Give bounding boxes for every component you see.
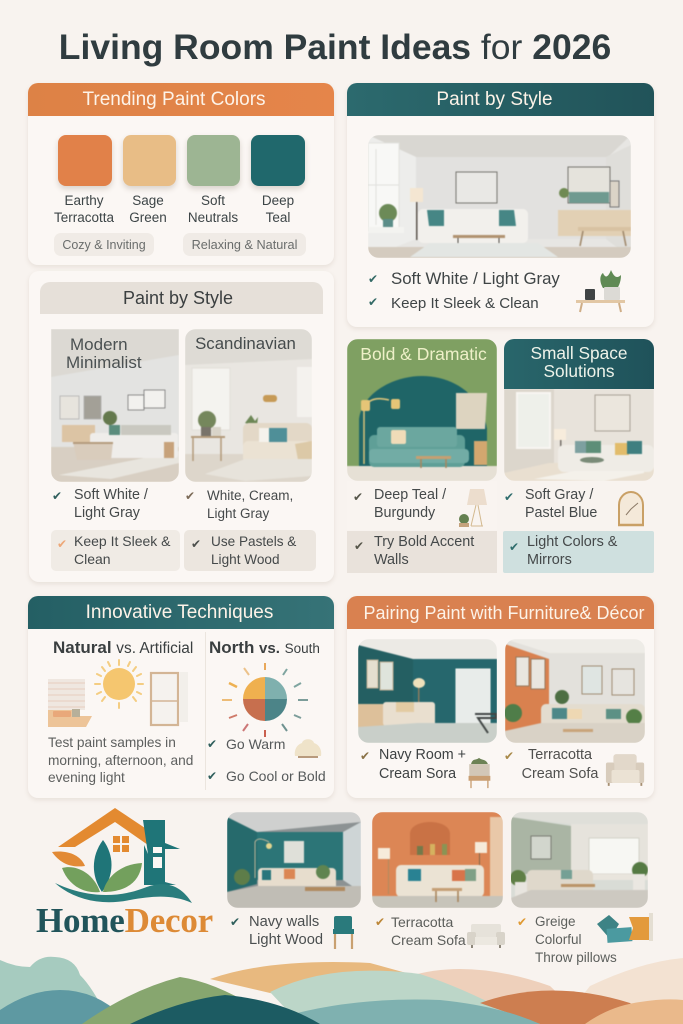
- logo: HomeDecor: [36, 808, 213, 940]
- check icon: ✔: [504, 490, 514, 504]
- panel: small space solutions: [503, 339, 654, 573]
- checklist: scandinavian: [185, 488, 293, 521]
- label: deep teal: Teal: [266, 210, 290, 224]
- label: sage green: Green: [129, 210, 167, 224]
- check icon: ✔: [185, 489, 195, 503]
- text: terracotta cream sofa: Cream Sofa: [522, 766, 598, 782]
- icon: arched clock: [618, 491, 644, 526]
- text: test paint samples: [48, 735, 193, 785]
- heading: paint by style: Paint by Style: [123, 288, 233, 308]
- text: soft white: Soft White / Light Gray: [391, 269, 560, 288]
- panel: paint by style left: [29, 271, 334, 582]
- label: scandinavian: Scandinavian: [195, 334, 296, 353]
- swatch: soft neutrals: [187, 135, 240, 186]
- image: small space room: [504, 389, 654, 481]
- icon: sun with swatches, sofa and window: [48, 659, 188, 727]
- image: greige room: [511, 812, 648, 908]
- check icon: ✔: [354, 539, 364, 553]
- check icon: ✔: [368, 295, 378, 309]
- swatch: deep teal: [251, 135, 305, 186]
- check icon: ✔: [368, 272, 378, 286]
- heading: innovative techniques: [28, 596, 334, 629]
- heading: paint by style: Paint by Style: [436, 89, 553, 110]
- swatch: sage green: [123, 135, 176, 186]
- text: deep teal: Burgundy: [374, 504, 435, 520]
- heading: trending paint colors: Trending Paint Colors: [82, 89, 266, 110]
- text: keep it sleek: [74, 533, 171, 566]
- divider: [205, 632, 206, 790]
- text: try bold: Walls: [374, 552, 409, 568]
- text: test paint samples: evening light: [48, 770, 125, 785]
- label: earthy terracotta: [54, 193, 114, 224]
- check icon: ✔: [504, 749, 514, 763]
- label: soft neutrals: Soft: [201, 193, 225, 208]
- check icon: ✔: [375, 915, 385, 929]
- text: try bold: Try Bold Accent: [374, 534, 474, 550]
- label: deep teal: Deep: [262, 193, 294, 208]
- checklist: modern minimalist: [52, 487, 148, 520]
- check icon: ✔: [52, 489, 62, 503]
- check icon: ✔: [191, 537, 201, 551]
- checklist: soft gray pastel blue: [504, 487, 644, 526]
- text: test paint samples: Test paint samples in: [48, 735, 176, 750]
- text: light colors: Mirrors: [527, 552, 572, 568]
- text: navy walls light wood: [249, 913, 323, 949]
- text: keep it sleek: Keep It Sleek & Clean: [391, 295, 539, 312]
- pill: cozy and inviting: [54, 233, 154, 256]
- text: light colors: Light Colors &: [527, 534, 617, 550]
- heading: small space solutions: Small Space: [530, 343, 628, 363]
- label: soft neutrals: Neutrals: [188, 210, 238, 224]
- text: light colors: [527, 534, 618, 568]
- text: white cream: Light Gray: [207, 506, 269, 520]
- text: deep teal: Deep Teal /: [374, 487, 446, 503]
- text: greige colorful throw pillows: Throw pillows: [535, 950, 617, 965]
- subheading: natural vs artificial: Natural vs. Artificial: [53, 638, 193, 657]
- text: deep teal: [374, 487, 446, 520]
- icon: lamp and plant: [459, 489, 487, 527]
- image: terracotta room with niche: [372, 812, 503, 908]
- pill: relaxing and natural: Relaxing & Natural: [192, 238, 297, 252]
- icon: teal chair: [330, 915, 358, 950]
- text: soft gray: Soft Gray /: [525, 487, 593, 503]
- text: go cool or bold: Go Cool or Bold: [226, 768, 326, 784]
- text: use pastels: [211, 534, 296, 567]
- image: navy walls room: [227, 812, 361, 908]
- image: modern minimalist room: [51, 329, 179, 482]
- text: greige colorful throw pillows: Colorful: [535, 932, 582, 947]
- heading: innovative techniques: Innovative Techniques: [86, 602, 273, 623]
- text: terracotta cream sofa: Cream Sofa: [391, 932, 466, 948]
- icon: north south color wheel: [222, 663, 308, 737]
- label: earthy terracotta: Earthy: [64, 193, 104, 208]
- icon: planter stool: [468, 758, 490, 788]
- panel: pairing paint with furniture: [347, 596, 654, 798]
- heading: bold and dramatic: Bold & Dramatic: [360, 344, 487, 364]
- text: try bold: [374, 534, 474, 568]
- image: living room white: [368, 135, 631, 258]
- image: navy room: [358, 639, 497, 743]
- panel: paint by style right: [347, 83, 654, 327]
- check icon: go cool: ✔: [207, 769, 217, 783]
- icon: cream armchair: [466, 923, 506, 949]
- text: soft gray: Pastel Blue: [525, 504, 597, 520]
- swatch: terracotta: [58, 135, 112, 186]
- label: sage green: [129, 193, 167, 224]
- text: navy walls light wood: Navy walls: [249, 914, 319, 930]
- callout: light colors and mirrors: [503, 531, 654, 573]
- text: go warm: Go Warm: [226, 736, 285, 752]
- pill: relaxing and natural: [183, 233, 306, 256]
- text: keep it sleek: Keep It Sleek &: [74, 533, 171, 549]
- check icon: go warm: ✔: [207, 737, 217, 751]
- text: navy walls light wood: Light Wood: [249, 932, 323, 948]
- callout: try bold accent walls: [347, 531, 497, 573]
- icon: table with plant: [576, 270, 625, 312]
- icon: throw pillows: [595, 912, 655, 944]
- text: navy room cream sofa: Cream Sora: [379, 766, 456, 782]
- callout: use pastels: [184, 530, 316, 571]
- check icon: ✔: [360, 749, 370, 763]
- text: keep it sleek: Clean: [74, 550, 111, 566]
- text: terracotta cream sofa: [522, 747, 598, 782]
- panel: bold and dramatic: [347, 339, 497, 573]
- text: greige colorful throw pillows: [535, 913, 617, 967]
- text: terracotta cream sofa: Terracotta: [528, 747, 592, 763]
- subheading: north vs south: North vs. South: [209, 638, 320, 657]
- heading: paint by style: [347, 83, 654, 116]
- text: navy room cream sofa: Navy Room +: [379, 747, 466, 763]
- label: earthy terracotta: Terracotta: [54, 210, 114, 224]
- heading: pairing paint: [347, 596, 654, 629]
- decorative hills: [0, 950, 683, 1024]
- checklist: soft white light gray: [368, 269, 560, 312]
- heading: small space solutions: Solutions: [543, 360, 615, 380]
- text: white cream: [207, 488, 293, 521]
- text: soft white: Soft White /: [74, 487, 148, 503]
- text: soft gray: [525, 487, 597, 520]
- image: terracotta wall room: [505, 639, 645, 743]
- text: soft white: [74, 487, 148, 520]
- heading: paint by style: [40, 282, 323, 314]
- check icon: ✔: [509, 540, 519, 554]
- label: soft neutrals: [188, 193, 238, 224]
- image: bold teal arch room: [347, 339, 497, 481]
- checklist: deep teal burgundy: [347, 481, 497, 530]
- text: soft white: Light Gray: [74, 504, 140, 520]
- check icon: ✔: [230, 915, 240, 929]
- label: deep teal: [262, 193, 294, 224]
- icon: armchair: [606, 754, 644, 786]
- check icon: ✔: [57, 537, 67, 551]
- heading: pairing paint: Pairing Paint with Furniture& Décor: [363, 603, 645, 623]
- wordmark: HomeDecor: [36, 901, 213, 940]
- text: test paint samples: morning, afternoon, and: [48, 752, 193, 768]
- text: navy room cream sofa: [379, 747, 466, 782]
- label: minimalist: Minimalist: [66, 353, 142, 372]
- text: white cream: White, Cream,: [207, 488, 293, 503]
- heading: small space solutions: [504, 339, 654, 389]
- title: Living Room Paint Ideas for 2026: [59, 27, 611, 67]
- image: scandinavian room: [185, 329, 312, 482]
- label: sage green: Sage: [132, 193, 164, 208]
- text: greige colorful throw pillows: Greige: [535, 914, 576, 929]
- text: terracotta cream sofa: Terracotta: [391, 914, 453, 930]
- text: use pastels: Light Wood: [211, 552, 280, 566]
- panel: innovative techniques: [28, 596, 334, 798]
- icon: small cushion chair: [294, 739, 322, 758]
- text: terracotta cream sofa: [391, 913, 466, 949]
- pill: cozy and inviting: Cozy & Inviting: [62, 238, 146, 252]
- heading: trending paint colors: [28, 83, 334, 116]
- check icon: ✔: [517, 915, 527, 929]
- check icon: ✔: [353, 490, 363, 504]
- panel: trending paint colors: [28, 83, 334, 265]
- icon: house and leaves: [52, 808, 192, 903]
- callout: keep it sleek: [51, 530, 180, 571]
- text: use pastels: Use Pastels &: [211, 534, 296, 549]
- label: modern minimalist: Modern: [70, 335, 128, 354]
